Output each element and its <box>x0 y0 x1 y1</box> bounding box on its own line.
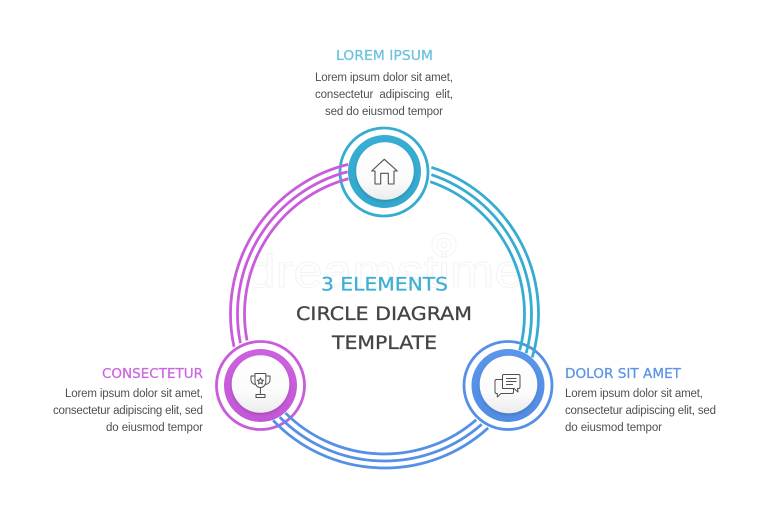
outer rings of the three nodes <box>216 128 552 430</box>
text block: left: CONSECTETUR <box>102 366 203 382</box>
center title: CIRCLE DIAGRAM <box>296 303 472 325</box>
center title <box>296 274 472 354</box>
icon: trophy <box>251 374 270 398</box>
icon: house <box>372 159 397 184</box>
text block: left: Lorem ipsum dolor sit amet, <box>65 388 203 400</box>
text block: left: do eiusmod tempor <box>106 422 203 434</box>
text block: left <box>53 366 203 434</box>
text block: top <box>315 48 453 118</box>
text block: right: DOLOR SIT AMET <box>565 366 682 382</box>
center title: TEMPLATE <box>331 332 437 354</box>
text block: top: consectetur adipiscing elit, <box>315 89 453 101</box>
cyan triple arc, top node to right node <box>191 120 578 508</box>
text block: right: do eiusmod tempor <box>565 422 662 434</box>
watermark: dreamstime <box>246 245 524 297</box>
text block: right <box>565 366 716 434</box>
purple triple arc, left node to top node <box>201 131 568 497</box>
text block: top: Lorem ipsum dolor sit amet, <box>315 72 453 84</box>
node: left, trophy <box>224 349 297 422</box>
text block: top: LOREM IPSUM <box>336 48 433 64</box>
text block: top: sed do eiusmod tempor <box>325 106 443 118</box>
node: right, chat <box>472 349 544 422</box>
node: top, home <box>348 135 421 208</box>
blue triple arc, right node to left node <box>167 96 602 519</box>
text block: left: consectetur adipiscing elit, sed <box>53 405 203 417</box>
text block: right: Lorem ipsum dolor sit amet, <box>565 388 703 400</box>
text block: right: consectetur adipiscing elit, sed <box>565 405 716 417</box>
icon: chat bubbles <box>495 374 520 397</box>
center title: 3 ELEMENTS <box>321 274 448 296</box>
